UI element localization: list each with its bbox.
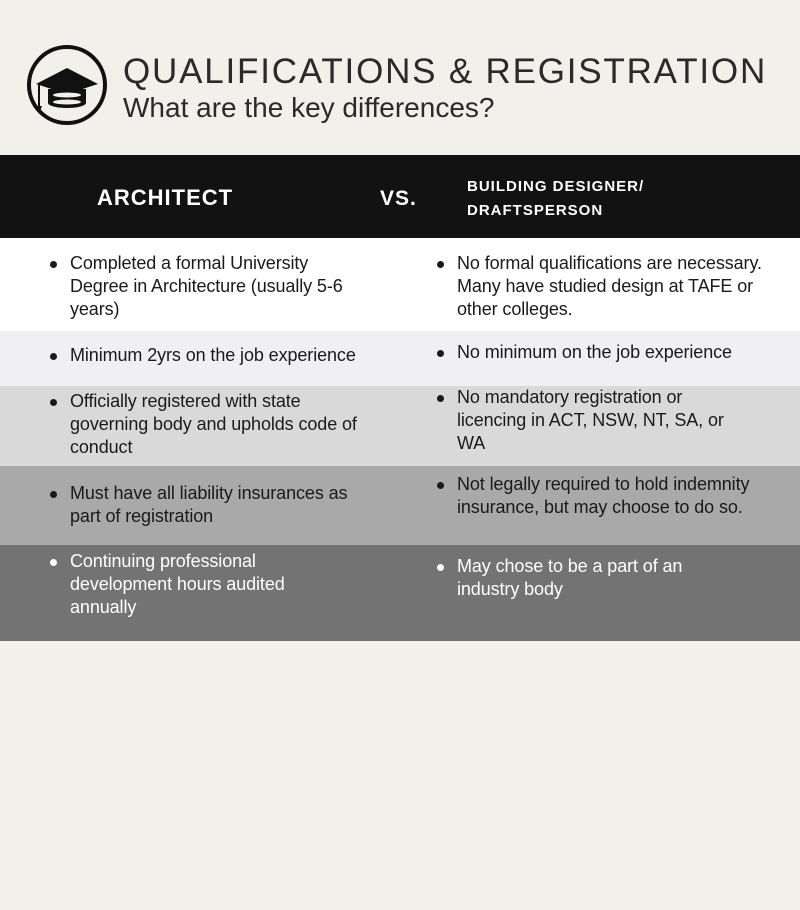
row 3: registration: WA: [457, 433, 485, 453]
subtitle: What are the key differences?: [123, 92, 494, 123]
row 5: professional development: [0, 545, 800, 641]
row 4: insurance: part of registration: [70, 506, 213, 526]
row 4: insurance: insurance, but may choose to do so.: [457, 497, 743, 517]
row 2: experience: Minimum 2yrs on the job experience: [70, 345, 356, 365]
row 3: registration: conduct: [70, 437, 132, 457]
row 5: professional development: May chose to be a part of an: [457, 556, 682, 576]
row 4: insurance: [0, 466, 800, 545]
row 1: qualifications: No formal qualifications are necessary.: [457, 253, 762, 273]
row 3: registration: governing body and upholds code of: [70, 414, 357, 434]
row 3: registration: No mandatory registration or: [457, 387, 682, 407]
row 4: insurance: Must have all liability insurances as: [70, 483, 347, 503]
header: building designer: [467, 178, 644, 219]
row 2: experience: [0, 331, 800, 386]
header: vs: VS.: [380, 187, 417, 210]
header: building designer: DRAFTSPERSON: [467, 202, 603, 219]
row 3: registration: [0, 386, 800, 466]
row 5: professional development: Continuing professional: [70, 551, 256, 571]
row 3: registration: Officially registered with state: [70, 391, 301, 411]
row 3: registration: licencing in ACT, NSW, NT, SA, or: [457, 410, 724, 430]
title: QUALIFICATIONS & REGISTRATION: [123, 52, 767, 91]
row 1: qualifications: [0, 238, 800, 331]
row 5: professional development: industry body: [457, 579, 563, 599]
header: building designer: BUILDING DESIGNER/: [467, 178, 644, 195]
row 1: qualifications: other colleges.: [457, 299, 573, 319]
row 1: qualifications: Degree in Architecture (usually 5-6: [70, 276, 343, 296]
header bar: [0, 155, 800, 238]
row 4: insurance: Not legally required to hold indemnity: [457, 474, 749, 494]
row 1: qualifications: Completed a formal University: [70, 253, 308, 273]
row 1: qualifications: Many have studied design at TAFE or: [457, 276, 753, 296]
row 1: qualifications: years): [70, 299, 119, 319]
row 5: professional development: development hours audited: [70, 574, 285, 594]
header: architect: ARCHITECT: [97, 185, 233, 210]
icon: graduation cap: [27, 45, 107, 125]
row 5: professional development: annually: [70, 597, 136, 617]
row 2: experience: No minimum on the job experience: [457, 342, 732, 362]
